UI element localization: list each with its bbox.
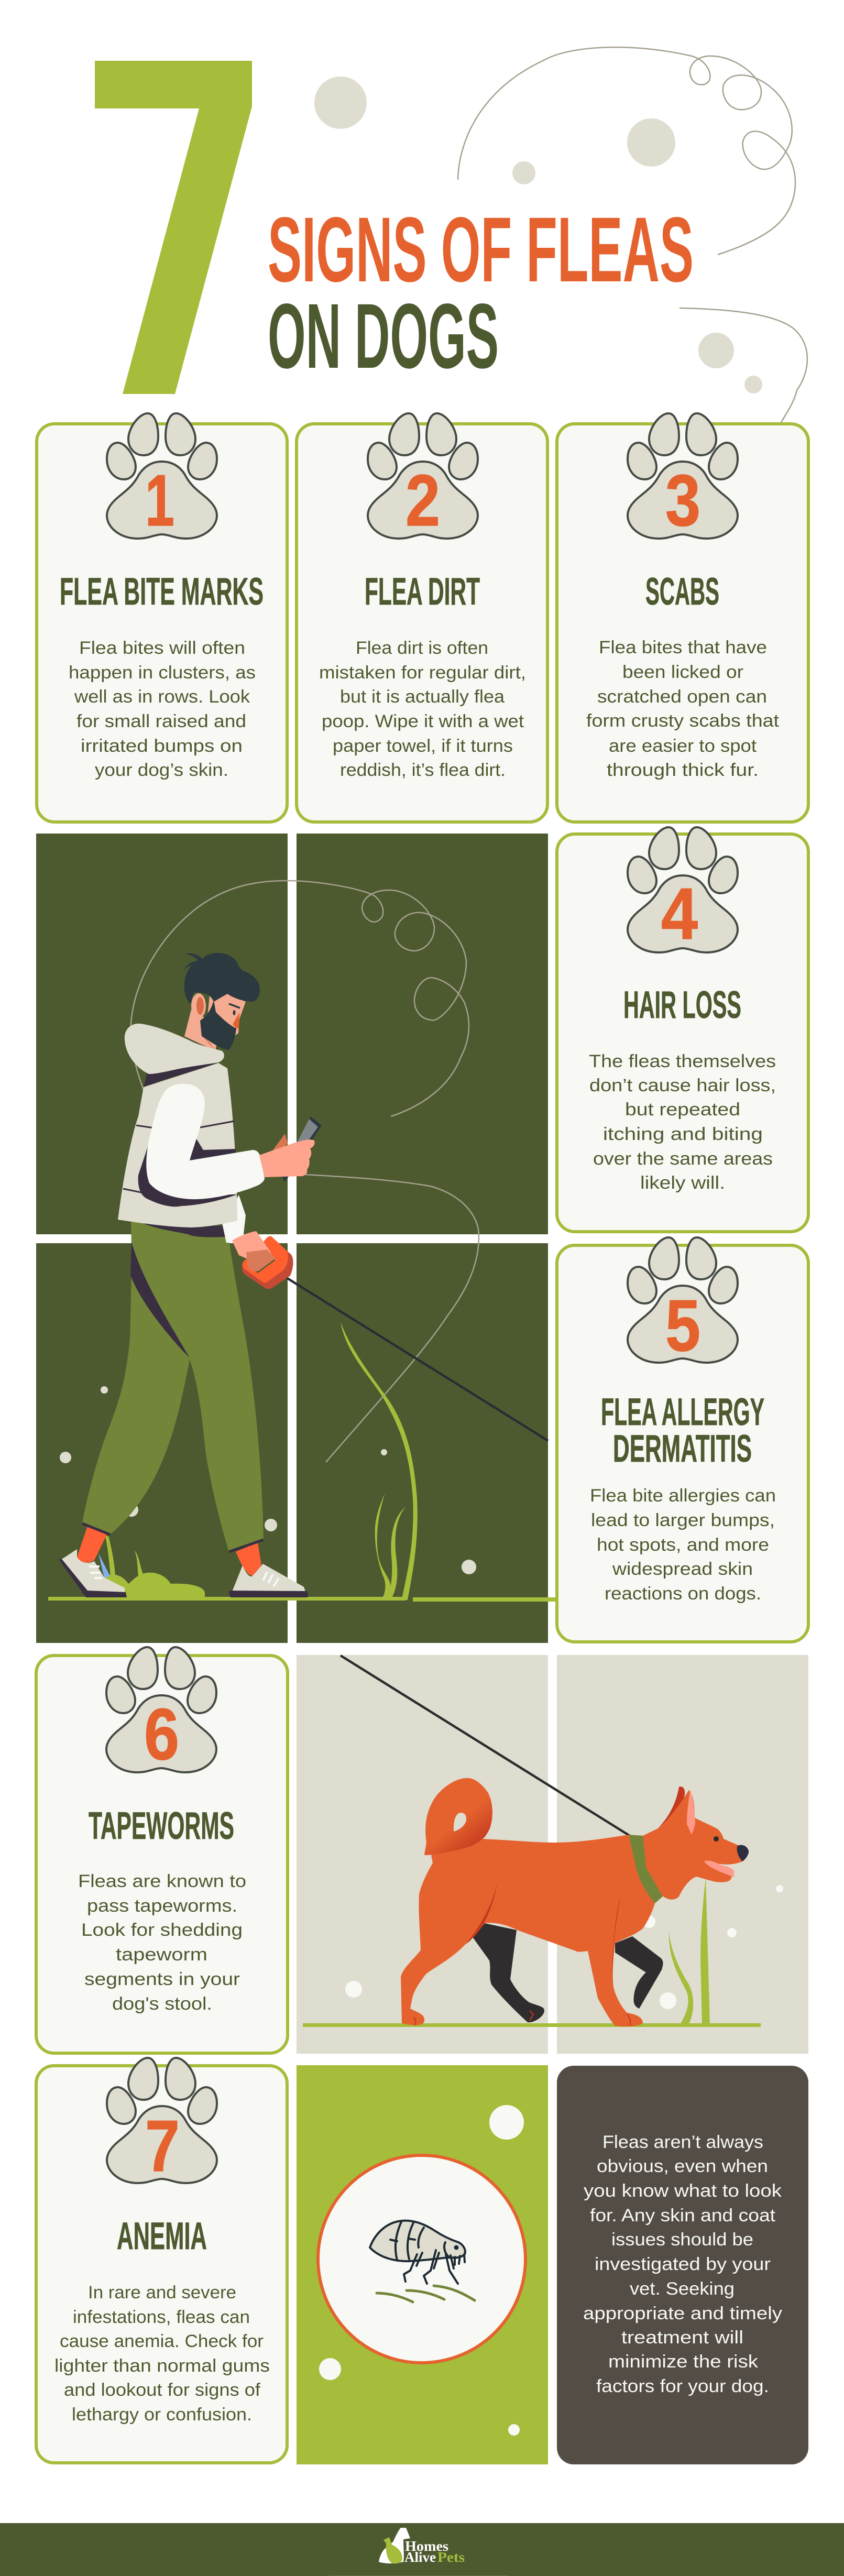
- body text: through thick fur.: [607, 760, 759, 780]
- trousers: [82, 1221, 264, 1552]
- body text: for small raised and: [76, 711, 246, 731]
- illustration panel: dog on leash: [297, 1655, 808, 2054]
- body text: [54, 2283, 270, 2425]
- closing text: treatment will: [621, 2328, 743, 2348]
- body text: form crusty scabs that: [586, 711, 780, 731]
- collar: [629, 1835, 663, 1903]
- body text: dog's stool.: [112, 1994, 212, 2014]
- phone: [282, 1116, 322, 1182]
- left shoe: [60, 1549, 125, 1592]
- header: [95, 47, 807, 423]
- title line two: ON DOGS: [268, 285, 499, 388]
- leash: [287, 1278, 548, 1441]
- decorative loop line: [458, 47, 795, 255]
- closing text: obvious, even when: [597, 2156, 768, 2176]
- icon: flea: [370, 2221, 465, 2284]
- leash handle: [242, 1236, 293, 1289]
- panel: sign 7 anemia: [36, 2058, 287, 2463]
- ground line: [48, 1597, 555, 1602]
- tongue: [704, 1861, 734, 1877]
- body text: hot spots, and more: [597, 1535, 769, 1555]
- body text: lighter than normal gums: [54, 2356, 270, 2376]
- hair: [183, 953, 260, 1004]
- logo wordmark: Pets: [437, 2549, 465, 2565]
- eye: [714, 1836, 719, 1841]
- torso shadow: [138, 1114, 237, 1207]
- dog body: [401, 1790, 742, 2026]
- toe marks: [414, 2011, 630, 2025]
- background dots: [60, 1386, 476, 1574]
- panel: sign 6 tapeworms: [36, 1647, 288, 2053]
- panel: sign 3 scabs: [557, 413, 808, 822]
- footer: [0, 2523, 844, 2576]
- body text: over the same areas: [593, 1149, 773, 1169]
- icon: paw 4: [628, 827, 738, 952]
- neck: [184, 1010, 220, 1051]
- logo wordmark: [404, 2538, 465, 2565]
- upper hand: [259, 1139, 315, 1177]
- body text: well as in rows. Look: [74, 687, 250, 707]
- left sole: [59, 1559, 127, 1597]
- tail: [424, 1778, 492, 1855]
- background dots: [345, 1885, 783, 2009]
- left sock: [77, 1526, 107, 1563]
- rear ear: [658, 1786, 685, 1828]
- body text: Look for shedding: [81, 1920, 243, 1940]
- body text: [78, 1871, 246, 2014]
- closing text: for. Any skin and coat: [590, 2206, 776, 2226]
- body text: paper towel, if it turns: [333, 736, 513, 756]
- body text: but repeated: [625, 1100, 740, 1120]
- closing text: investigated by your: [595, 2254, 771, 2274]
- illustration panel: flea: [297, 2065, 548, 2464]
- heading: HAIR LOSS: [623, 984, 741, 1026]
- heading: FLEA BITE MARKS: [60, 571, 264, 613]
- closing text: issues should be: [611, 2230, 753, 2250]
- body text: happen in clusters, as: [69, 663, 256, 683]
- body text: pass tapeworms.: [87, 1896, 237, 1916]
- vest stripes: [123, 1121, 234, 1193]
- big number seven: [95, 61, 252, 394]
- body text: tapeworm: [116, 1945, 207, 1965]
- icon: paw 7: [107, 2058, 217, 2183]
- grass: [303, 1878, 761, 2027]
- collar shadow: [144, 1063, 215, 1087]
- green background panels: [36, 834, 548, 1643]
- body text: reddish, it’s flea dirt.: [340, 760, 506, 780]
- blue shoe accent: [98, 1553, 110, 1578]
- body text: Flea dirt is often: [356, 638, 488, 658]
- bush: [100, 1573, 205, 1597]
- body text: likely will.: [640, 1173, 725, 1193]
- beige background panels: [297, 1655, 808, 2054]
- panel: sign 1 flea bite marks: [37, 413, 287, 822]
- number 7: 7: [145, 2106, 180, 2187]
- icon: paw 3: [628, 413, 738, 539]
- body text: Flea bites will often: [79, 638, 245, 658]
- number 6: 6: [144, 1694, 179, 1775]
- body text: itching and biting: [603, 1124, 763, 1144]
- right sole: [229, 1591, 308, 1597]
- grass strokes: [377, 2286, 475, 2302]
- face: [207, 993, 246, 1043]
- decorative loop line: [131, 881, 469, 1116]
- ear inner: [687, 1791, 695, 1835]
- body text: mistaken for regular dirt,: [319, 663, 526, 683]
- trouser cuffs: [82, 1523, 264, 1552]
- hood: [125, 1024, 224, 1074]
- body text: In rare and severe: [88, 2283, 236, 2303]
- man figure: [59, 953, 322, 1597]
- number 3: 3: [665, 460, 700, 541]
- panel: sign 5 flea allergy dermatitis: [557, 1237, 808, 1642]
- icon: paw 6: [106, 1647, 216, 1772]
- body text: scratched open can: [597, 687, 767, 707]
- body text: lethargy or confusion.: [72, 2405, 252, 2425]
- body text: [586, 638, 780, 780]
- background dots: [319, 2105, 524, 2436]
- closing text: vet. Seeking: [630, 2279, 735, 2299]
- lower hand: [232, 1231, 273, 1258]
- lime background: [297, 2065, 548, 2464]
- icon: paw 1: [107, 413, 217, 539]
- shoe stripes: [89, 1566, 279, 1586]
- closing text: [583, 2132, 782, 2396]
- body text: your dog’s skin.: [95, 760, 228, 780]
- closing text: Fleas aren’t always: [602, 2132, 763, 2152]
- body text: widespread skin: [612, 1559, 753, 1579]
- right sock: [236, 1542, 261, 1576]
- body text: don’t cause hair loss,: [589, 1076, 776, 1095]
- nose: [737, 1845, 749, 1861]
- body text: lead to larger bumps,: [591, 1510, 775, 1530]
- body text: Flea bites that have: [599, 638, 767, 657]
- heading: DERMATITIS: [613, 1428, 752, 1470]
- icon: cat silhouette: [383, 2537, 402, 2563]
- logo wordmark: Alive: [404, 2549, 436, 2565]
- icon: paw 5: [628, 1237, 738, 1363]
- body text: infestations, fleas can: [73, 2307, 250, 2327]
- body text: reactions on dogs.: [605, 1584, 761, 1604]
- body text: are easier to spot: [609, 736, 757, 756]
- body text: segments in your: [84, 1969, 240, 1989]
- decorative lower line: [679, 308, 807, 423]
- panel: sign 2 flea dirt: [297, 413, 547, 822]
- closing text: you know what to look: [584, 2181, 782, 2201]
- beard: [200, 1000, 236, 1050]
- body text: irritated bumps on: [81, 736, 243, 756]
- logo wordmark: Homes: [405, 2538, 448, 2554]
- trouser shadow: [130, 1242, 190, 1358]
- thumb: [273, 1134, 288, 1153]
- body text: cause anemia. Check for: [60, 2331, 264, 2351]
- number 4: 4: [661, 873, 698, 955]
- number 5: 5: [665, 1285, 700, 1366]
- body text: poop. Wipe it with a wet: [322, 711, 524, 731]
- nose: [233, 1013, 239, 1028]
- fingers: [246, 1249, 276, 1271]
- heading: FLEA DIRT: [365, 571, 480, 613]
- decorative lower line: [297, 1174, 479, 1462]
- body text: been licked or: [622, 662, 743, 682]
- logo: [379, 2528, 465, 2565]
- waist dark band: [142, 1223, 225, 1237]
- body text: [590, 1486, 776, 1604]
- body text: [589, 1051, 776, 1193]
- vest: [118, 1063, 237, 1227]
- number 1: 1: [145, 460, 174, 541]
- icon: paw 2: [368, 413, 478, 539]
- panel: closing note: [557, 2066, 808, 2464]
- body text: The fleas themselves: [589, 1051, 776, 1071]
- number 2: 2: [405, 460, 440, 541]
- body text: [69, 638, 256, 780]
- illustration panel: man walking dog: [36, 834, 555, 1643]
- closing text: factors for your dog.: [596, 2376, 769, 2396]
- icon: dog silhouette: [379, 2528, 410, 2563]
- right shoe: [232, 1564, 305, 1592]
- leash: [341, 1656, 630, 1836]
- closing text: minimize the risk: [608, 2352, 759, 2372]
- heading: TAPEWORMS: [89, 1805, 234, 1847]
- body text: [319, 638, 526, 780]
- body text: and lookout for signs of: [64, 2380, 261, 2400]
- decorative dots: [314, 76, 762, 393]
- body text: Flea bite allergies can: [590, 1486, 776, 1506]
- sleeve: [146, 1084, 265, 1199]
- panel: sign 4 hair loss: [557, 827, 808, 1232]
- grass blades: [105, 1322, 418, 1601]
- body text: but it is actually flea: [340, 687, 505, 707]
- front far leg: [615, 1936, 663, 2009]
- shirt tail: [222, 1195, 246, 1243]
- body shade lines: [465, 1875, 620, 1986]
- body text: Fleas are known to: [78, 1871, 246, 1891]
- flea badge: [318, 2155, 525, 2363]
- ear: [191, 993, 206, 1018]
- eye and brow: [229, 1004, 240, 1008]
- heading: [601, 1391, 764, 1470]
- heading: ANEMIA: [117, 2215, 207, 2257]
- heading: SCABS: [645, 571, 719, 613]
- rear far leg: [472, 1923, 544, 2022]
- closing text: appropriate and timely: [583, 2304, 782, 2323]
